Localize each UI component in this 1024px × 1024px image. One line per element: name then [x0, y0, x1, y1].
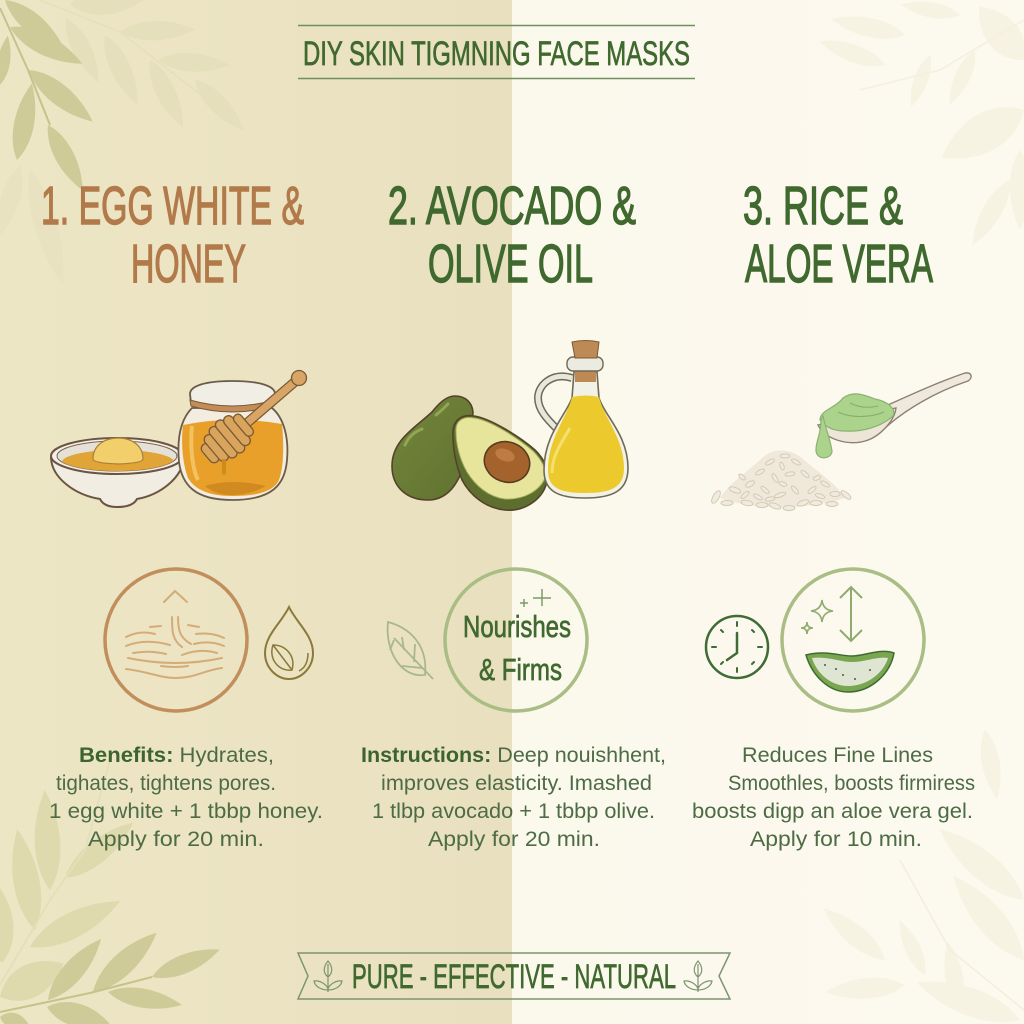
icon: nourishes and firms badge: Nourishes	[463, 609, 571, 644]
icon: water drop with leaf	[265, 607, 313, 679]
text block: instructions: Apply for 20 min.	[428, 828, 600, 851]
icon: aloe lifting circle	[782, 569, 924, 711]
text block: instructions	[361, 744, 666, 851]
icon: nourishes and firms badge: & Firms	[479, 652, 562, 687]
text block: results: boosts digp an aloe vera gel.	[692, 800, 973, 823]
icon: nourishes and firms badge	[445, 569, 587, 711]
text block: results: Smoothles, boosts firmiress	[728, 772, 975, 795]
text block: benefits: Benefits: Hydrates,	[79, 744, 274, 767]
heading: rice and aloe vera	[743, 176, 933, 294]
heading: avocado and olive oil	[388, 176, 636, 294]
illustration: olive oil bottle	[538, 340, 628, 498]
heading: avocado and olive oil: OLIVE OIL	[428, 234, 593, 294]
text block: benefits: tighates, tightens pores.	[56, 772, 276, 795]
decoration: bottom-right leaves	[817, 728, 1024, 1024]
decoration: top-right leaves	[816, 0, 1024, 250]
icon: clock	[706, 616, 768, 678]
text block: results	[692, 744, 975, 851]
illustration: avocado	[392, 396, 548, 510]
heading: egg white and honey: HONEY	[131, 234, 246, 294]
footer banner	[298, 953, 730, 999]
decoration: bottom-left leaves	[0, 760, 223, 1024]
title: DIY SKIN TIGMNING FACE MASKS	[303, 35, 690, 73]
text block: results: Apply for 10 min.	[750, 828, 922, 851]
heading: avocado and olive oil: 2. AVOCADO &	[388, 176, 636, 236]
text block: instructions: 1 tlbp avocado + 1 tbbp olive.	[372, 800, 655, 823]
illustration: aloe gel spoon	[816, 373, 971, 458]
footer banner: PURE - EFFECTIVE - NATURAL	[352, 958, 676, 996]
heading: egg white and honey: 1. EGG WHITE &	[41, 176, 304, 236]
illustration: egg in bowl	[51, 438, 184, 507]
heading: rice and aloe vera: 3. RICE &	[743, 176, 903, 236]
illustration: honey jar with dipper	[178, 370, 306, 500]
text block: instructions: improves elasticity. Imashed	[381, 772, 652, 795]
icon: skin lifting circle	[105, 569, 247, 711]
decoration: top-left leaves	[0, 0, 250, 289]
text block: benefits: Apply for 20 min.	[88, 828, 264, 851]
illustration: rice pile	[710, 450, 852, 510]
heading: egg white and honey	[41, 176, 304, 294]
icon: leaf outline	[388, 622, 433, 679]
text block: results: Reduces Fine Lines	[742, 744, 933, 767]
text block: benefits	[49, 744, 323, 851]
text block: benefits: 1 egg white + 1 tbbp honey.	[49, 800, 323, 823]
text block: instructions: Instructions: Deep nouishhent,	[361, 744, 666, 767]
